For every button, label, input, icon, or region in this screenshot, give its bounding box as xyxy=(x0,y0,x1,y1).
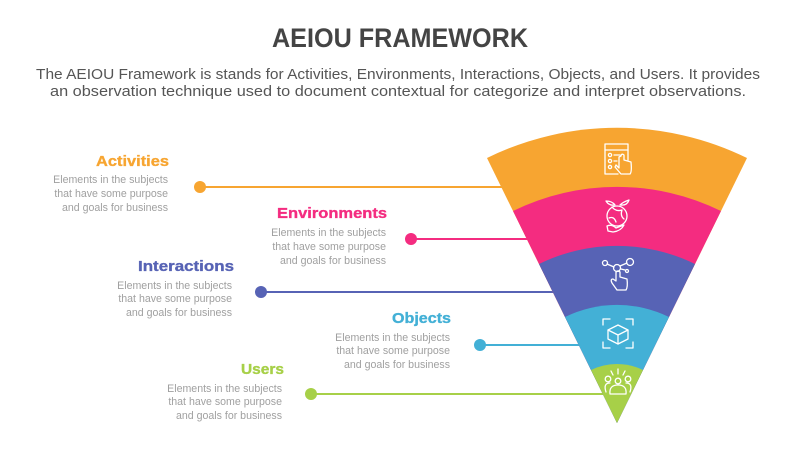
text block: environments: Environments xyxy=(277,205,387,222)
text block: interactions: Interactions xyxy=(138,258,234,275)
text block: interactions: Elements in the subjects xyxy=(117,280,232,292)
segment: environments xyxy=(513,187,721,423)
text block: objects xyxy=(335,310,451,371)
segment: activities xyxy=(487,128,747,423)
description xyxy=(36,66,760,100)
icon: globe with leaves in hand xyxy=(606,200,629,232)
icon: group of users xyxy=(605,369,631,394)
segment: interactions xyxy=(539,246,695,423)
description: The AEIOU Framework is stands for Activities, Environments, Interactions, Objects, and Users. It provides xyxy=(36,66,760,83)
text block: users: and goals for business xyxy=(176,410,282,422)
text block: activities: Elements in the subjects xyxy=(53,174,168,186)
text block: activities: that have some purpose xyxy=(54,188,168,200)
segment: users xyxy=(591,364,643,423)
connector: interactions xyxy=(255,286,560,298)
text block: activities: and goals for business xyxy=(62,202,168,214)
icon: touch network xyxy=(602,258,634,290)
text block: activities: Activities xyxy=(96,153,169,170)
text block: interactions: that have some purpose xyxy=(118,293,232,305)
text block: environments xyxy=(271,205,387,267)
text block: users: Elements in the subjects xyxy=(167,383,282,395)
text block: interactions xyxy=(117,258,234,319)
description: an observation technique used to document contextual for categorize and interpret observations. xyxy=(50,83,746,100)
text block: objects: and goals for business xyxy=(344,359,450,371)
connector: objects xyxy=(474,339,585,351)
text block: activities xyxy=(53,153,169,214)
text block: interactions: and goals for business xyxy=(126,307,232,319)
text block: environments: Elements in the subjects xyxy=(271,227,386,239)
title: AEIOU FRAMEWORK xyxy=(272,23,528,53)
icon: 3D box in frame xyxy=(603,319,633,348)
segment: objects xyxy=(565,305,669,423)
connector: users xyxy=(305,388,610,400)
text block: users xyxy=(167,361,284,422)
text block: users: Users xyxy=(241,361,284,378)
text block: objects: Elements in the subjects xyxy=(335,332,450,344)
text block: environments: that have some purpose xyxy=(272,241,386,253)
connector: activities xyxy=(194,181,510,193)
text block: objects: that have some purpose xyxy=(336,345,450,357)
icon: checklist with hand xyxy=(605,144,631,174)
text block: users: that have some purpose xyxy=(168,396,282,408)
connector: environments xyxy=(405,233,535,245)
text block: environments: and goals for business xyxy=(280,255,386,267)
text block: objects: Objects xyxy=(392,310,451,327)
funnel chart xyxy=(487,128,747,423)
